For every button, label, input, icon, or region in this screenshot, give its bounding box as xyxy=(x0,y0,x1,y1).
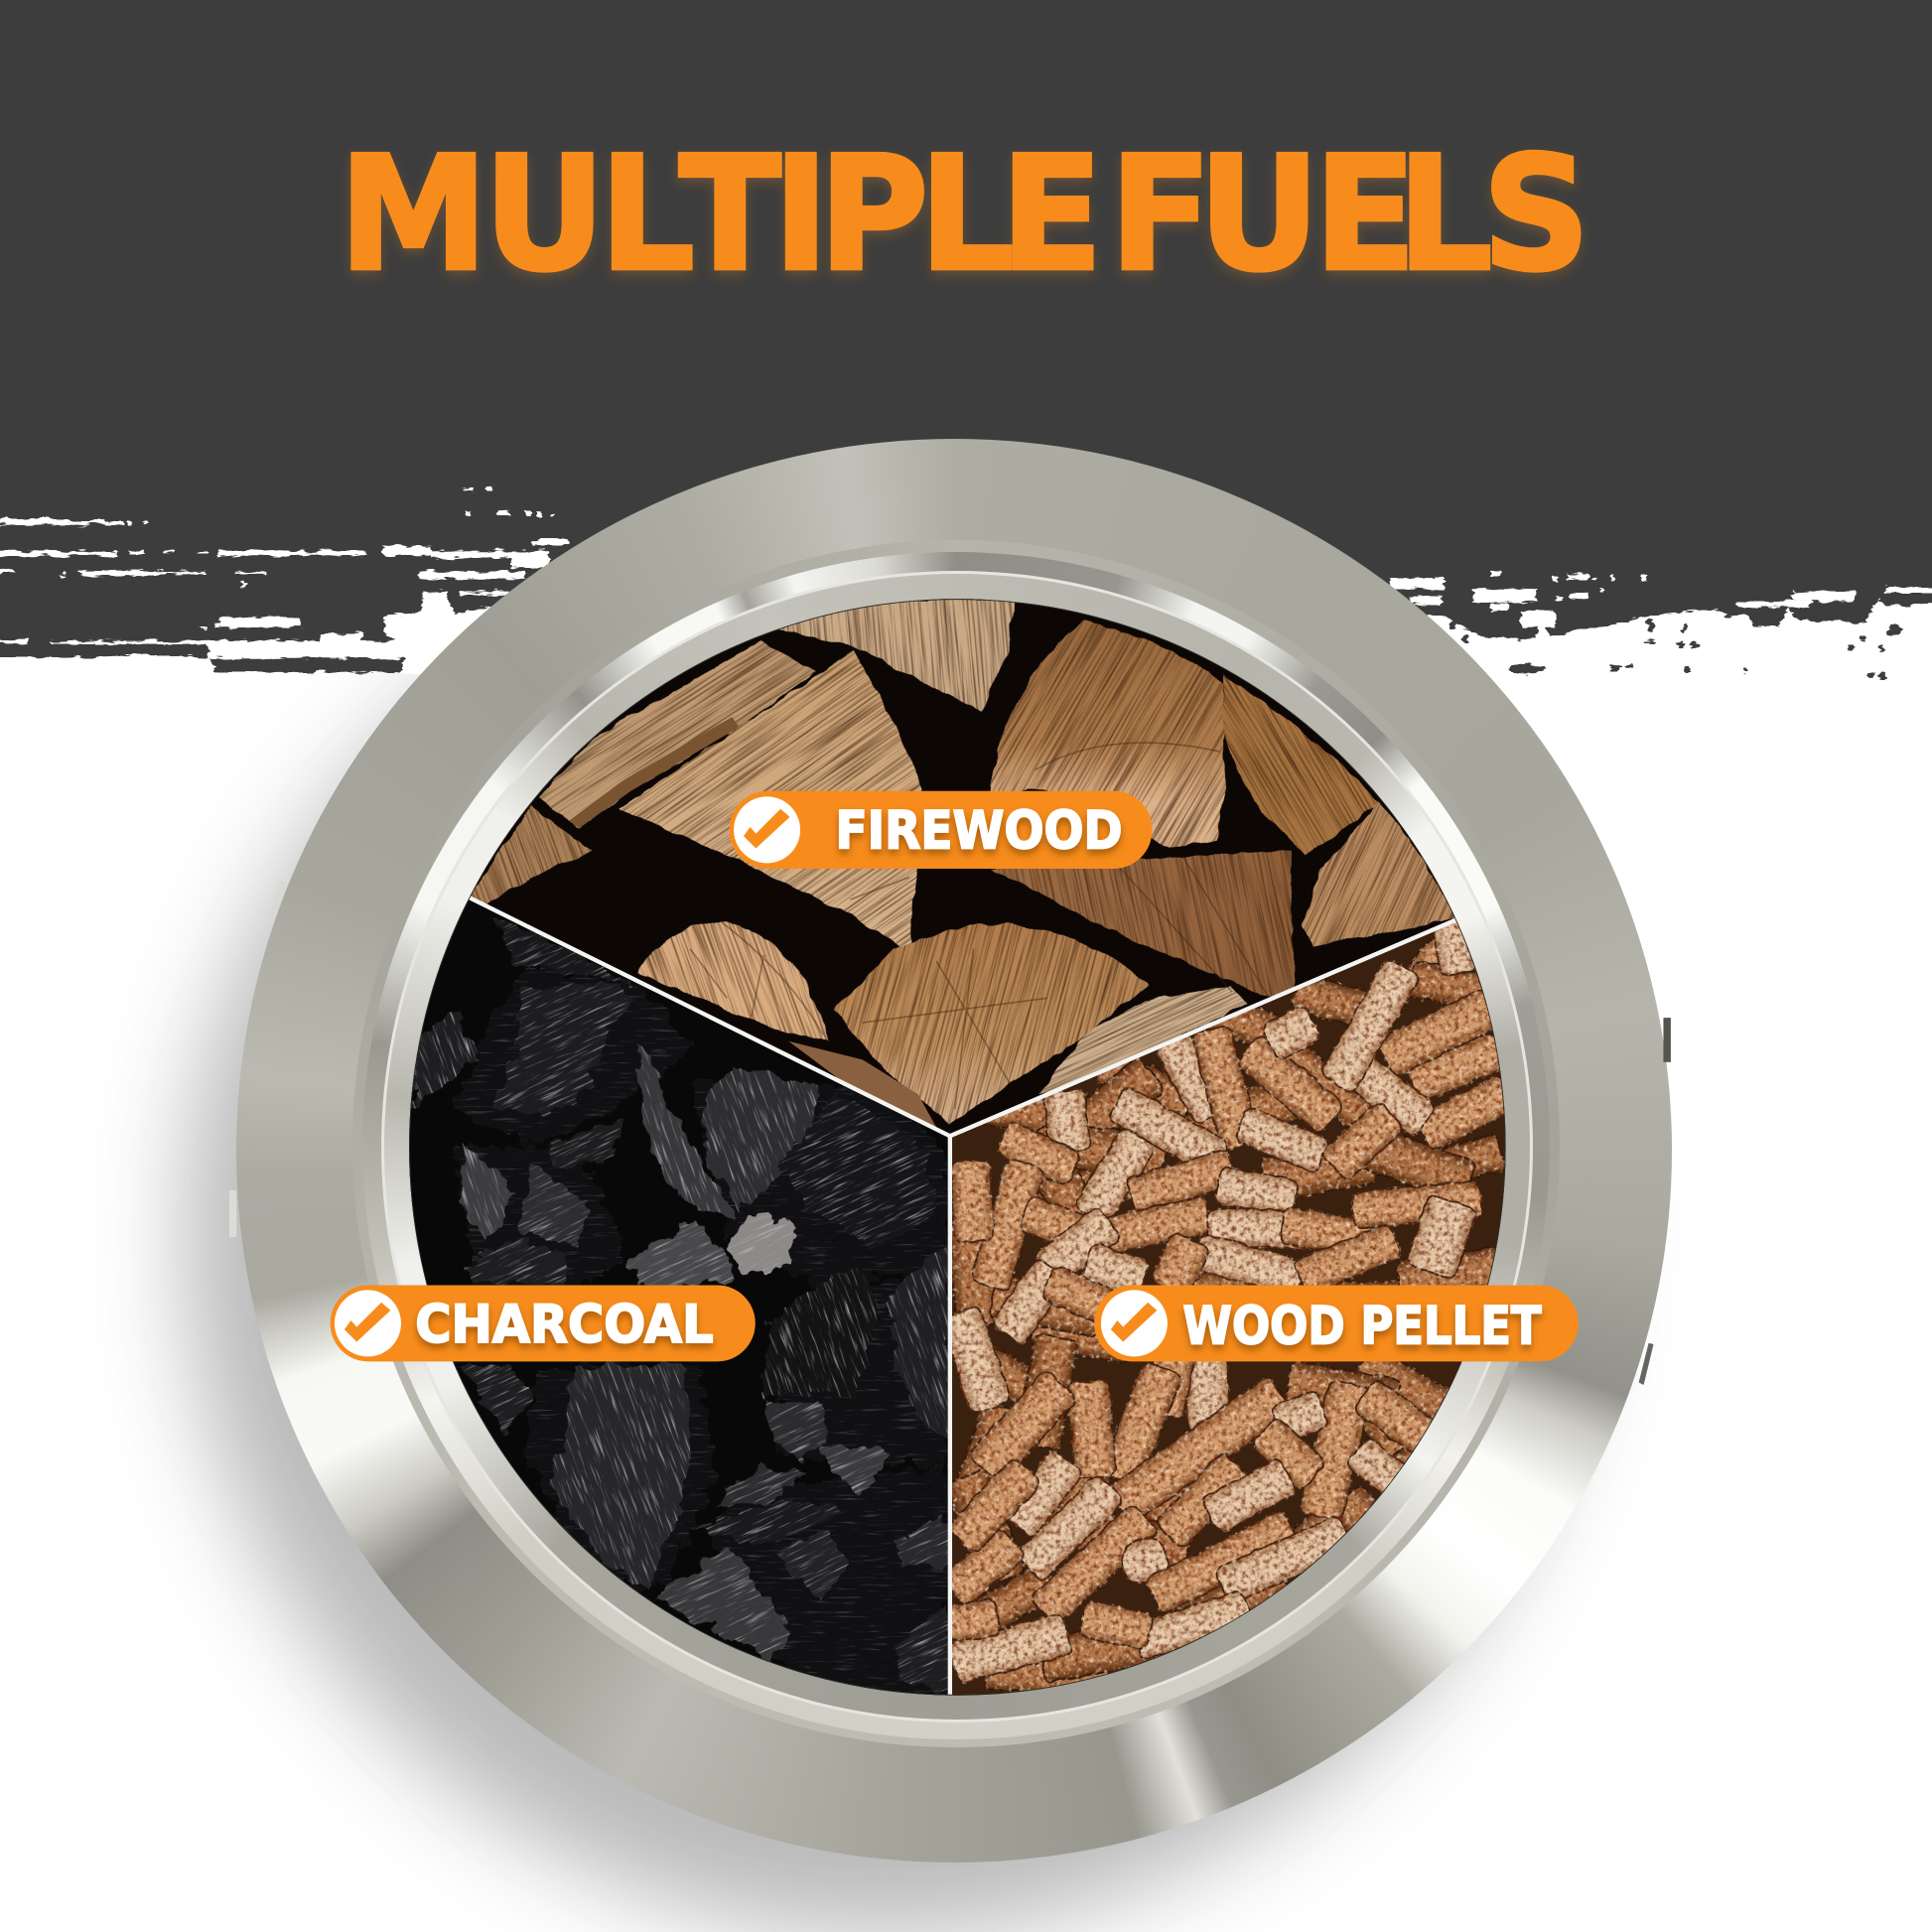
panel: firewood xyxy=(469,599,1456,1134)
label: wood pellet: WOOD PELLET xyxy=(1182,1297,1542,1356)
dividers xyxy=(466,896,1457,1701)
panel: charcoal xyxy=(409,897,950,1696)
lip: inner gray band xyxy=(384,574,1530,1720)
label: firewood: FIREWOOD xyxy=(835,801,1123,861)
title: MULTIPLE FUELS xyxy=(339,122,1590,306)
lip: thin white line xyxy=(381,571,1533,1723)
pellets back layer xyxy=(926,905,1528,1710)
fuel disc xyxy=(347,599,1561,1696)
icon: ring mounting tabs xyxy=(229,880,1671,1385)
label: firewood xyxy=(730,791,1152,869)
pellets front layer xyxy=(940,897,1518,1684)
label: charcoal: CHARCOAL xyxy=(415,1296,714,1355)
label: charcoal xyxy=(331,1285,756,1361)
fuel photo disc, tabs and labels xyxy=(229,149,1671,1696)
outer brushed band xyxy=(236,439,1672,1863)
label: wood pellet xyxy=(1094,1285,1579,1361)
lip: soft outer edge xyxy=(352,540,1560,1747)
panel: wood pellets xyxy=(926,897,1528,1713)
lip: shaded and cream band xyxy=(362,552,1550,1739)
charcoal underlay chunks xyxy=(456,961,949,1701)
